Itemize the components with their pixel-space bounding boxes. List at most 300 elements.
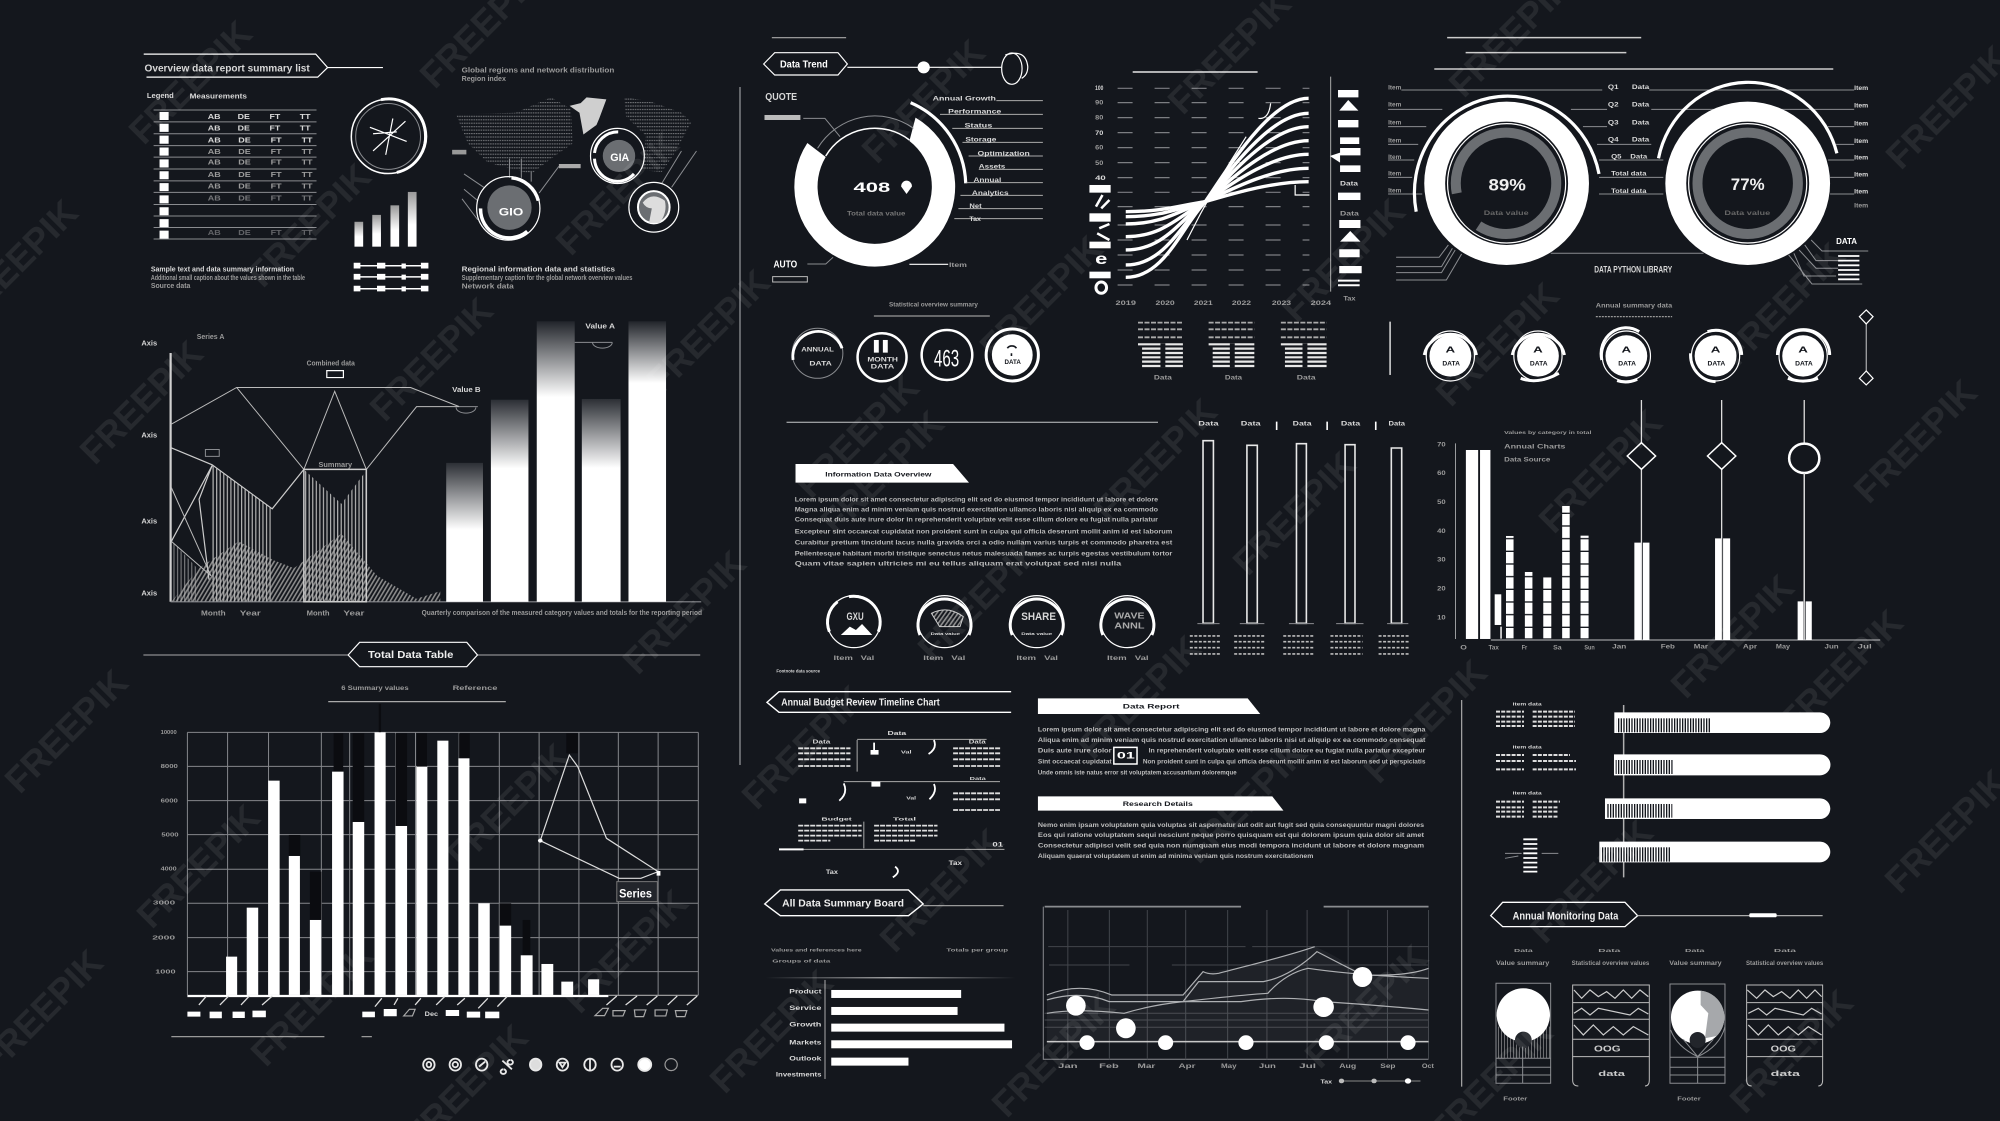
tube columns: Data xyxy=(1293,420,1312,427)
gauge: topic 3: SHARE xyxy=(1021,610,1056,623)
gauge 2 xyxy=(858,333,907,381)
tube columns: Data xyxy=(1388,420,1405,427)
chart axis labels: Jun xyxy=(1259,1062,1276,1070)
text block A: In reprehenderit voluptate velit esse cillum dolore eu fugiat nulla pariatur excepteur xyxy=(1149,747,1425,754)
axis labels: Year xyxy=(343,609,364,618)
card 4: zigzag table xyxy=(1746,948,1824,1086)
gauge 2 xyxy=(1512,331,1564,381)
area chart: wireframe polygons xyxy=(141,332,701,618)
callout: map marker large xyxy=(477,177,540,240)
stem markers with twin bars: Sun xyxy=(1584,644,1595,651)
line chart: sigmoid curves xyxy=(1089,71,1362,307)
watermarks: FREEPIK xyxy=(1522,812,1661,951)
bar chart: axis and segmented bars: Annual Charts xyxy=(1504,443,1566,450)
card 2: zigzag table: OOG xyxy=(1594,1044,1621,1054)
table: rows with white squares: AB DE FT TT xyxy=(208,124,311,133)
chart axis labels: Oct xyxy=(1422,1062,1434,1070)
callouts under rings: Annual summary data xyxy=(1596,301,1673,309)
leader lines and labels: Total data xyxy=(1611,169,1647,177)
banner heading A: Data Report xyxy=(1123,702,1180,710)
heading: top-left header tab xyxy=(144,54,383,77)
heading: horizontal bars tab xyxy=(765,890,1016,978)
bar chart: horizontal bars: Growth xyxy=(789,1021,822,1028)
chart axis labels: Jul xyxy=(1299,1062,1316,1070)
stem markers with twin bars: Feb xyxy=(1661,643,1675,650)
heading: network tab: Annual Budget Review Timeline Chart xyxy=(781,696,940,708)
sliders xyxy=(354,263,428,291)
table: rows with white squares: AB DE FT TT xyxy=(208,170,313,179)
chart axis labels: Feb xyxy=(1099,1062,1119,1070)
donut chart: 408: Total data value xyxy=(847,209,905,217)
donut labels: Optimization xyxy=(978,149,1030,157)
gauge 2: A xyxy=(1533,345,1544,354)
donut labels: QUOTE xyxy=(765,92,797,103)
donut chart: 408 xyxy=(794,103,966,267)
y axis labels: 5000 xyxy=(161,832,179,839)
leader lines and labels: Item xyxy=(1388,136,1402,144)
heading: top-left header tab: Overview data report summary list xyxy=(145,64,310,74)
chart axis labels: Sep xyxy=(1380,1062,1396,1070)
watermarks: FREEPIK xyxy=(1846,372,1985,511)
donut labels: Annual Growth xyxy=(933,94,996,102)
x-axis labels: 2023 xyxy=(1272,299,1291,307)
watermarks: FREEPIK xyxy=(1356,652,1495,791)
axis labels: Axis xyxy=(141,589,157,598)
gauge 1 xyxy=(792,328,843,378)
table: rows with white squares: AB DE FT TT xyxy=(208,194,313,203)
gauge row: four topic gauges xyxy=(776,596,1154,674)
leader lines and labels: Item xyxy=(1854,187,1869,195)
leader lines and labels: Q3 Data xyxy=(1608,118,1650,126)
leader lines and labels: Item xyxy=(1854,170,1869,178)
watermarks: FREEPIK xyxy=(1428,275,1567,414)
x-axis labels: 2019 xyxy=(1116,299,1136,307)
gauge: topic 4: ANNL xyxy=(1114,621,1145,631)
gauge 3: 463 xyxy=(934,345,959,372)
axis labels: Month xyxy=(201,609,226,618)
heading: donut section tab xyxy=(764,53,1028,84)
leader lines and labels: Total data xyxy=(1611,187,1647,195)
heading: horizontal bars tab: Totals per group xyxy=(946,948,1009,953)
mini tables: three striped columns xyxy=(1138,323,1327,381)
bar chart: horizontal bars: Product xyxy=(789,987,822,995)
heading: bar chart tab: 6 Summary values xyxy=(341,684,409,692)
y axis labels: 6000 xyxy=(161,798,179,804)
icon row xyxy=(423,1058,677,1074)
stem markers with twin bars: Mar xyxy=(1694,643,1709,650)
gauge 3: A xyxy=(1622,345,1632,354)
watermarks: FREEPIK xyxy=(972,228,1111,367)
bar chart: small four bars xyxy=(354,192,417,247)
watermarks: FREEPIK xyxy=(1772,602,1911,741)
card 1: white circle: Data xyxy=(1514,948,1533,953)
heading: horizontal bars tab: All Data Summary Board xyxy=(782,897,904,909)
y axis labels: 2000 xyxy=(152,935,176,941)
heading: horizontal bars tab: Groups of data xyxy=(772,959,832,964)
text block A: Aliqua enim ad minim veniam quis nostrud exercitation ullamco laboris nisi ut aliquip ex ea commodo consequat xyxy=(1038,736,1426,744)
banner heading B xyxy=(1038,796,1283,811)
callout: map marker right: GIA xyxy=(610,152,629,164)
heading: bar chart tab: Reference xyxy=(453,684,497,692)
text block B: Aliquam quaerat voluptatem ut enim ad minima veniam quis nostrum exercitationem xyxy=(1038,852,1313,860)
callout: map marker right xyxy=(591,128,644,184)
stem markers with twin bars: Jun xyxy=(1825,643,1839,650)
ring chart: 77%: Data value xyxy=(1724,209,1770,217)
left icon strip: e xyxy=(1095,250,1107,268)
donut labels: Analytics xyxy=(972,189,1009,197)
stem markers with twin bars: Jan xyxy=(1612,643,1626,650)
leader lines and labels: Item xyxy=(1388,100,1402,108)
left icon strip: 40 xyxy=(1095,174,1106,182)
label blocks: Item data xyxy=(1513,701,1542,706)
text block A: Lorem ipsum dolor sit amet consectetur adipiscing elit sed do eiusmod tempor incididunt ut labore et dolore magna xyxy=(1038,725,1426,733)
leader lines and labels: Q5 Data xyxy=(1611,152,1648,160)
gauge captions: Item Val xyxy=(1107,654,1149,662)
network diagram: Val xyxy=(901,750,912,755)
text block: table note: Additional small caption about the values shown in the table xyxy=(151,273,306,282)
chart axis labels: Aug xyxy=(1339,1062,1356,1070)
watermarks: FREEPIK xyxy=(1176,732,1315,871)
text block: map note: Regional information data and statistics xyxy=(462,265,615,274)
axis labels: Summary xyxy=(318,460,353,469)
bar chart: five gradient bars: Value B xyxy=(452,385,481,394)
watermarks: FREEPIK xyxy=(1531,402,1670,541)
card 3: circle with grey sector: Value summary xyxy=(1669,960,1722,967)
leader lines and labels: Item xyxy=(1388,169,1402,177)
card 1: white circle: Value summary xyxy=(1496,960,1550,967)
axis labels: Series A xyxy=(197,332,225,341)
network diagram: Data xyxy=(812,739,831,745)
diamond slider xyxy=(1859,310,1873,385)
table: rows with white squares: AB DE FT TT xyxy=(208,157,313,166)
x-axis labels: 2022 xyxy=(1232,299,1251,307)
bar chart: axis and segmented bars: Values by category in total xyxy=(1504,431,1592,436)
callouts under rings xyxy=(1396,237,1868,317)
heading: bar chart tab xyxy=(143,642,700,702)
text block: paragraph: Quam vitae sapien ultricies mi eu tellus aliquam erat volutpat sed nisi nulla xyxy=(795,559,1122,567)
bar chart: five gradient bars xyxy=(422,321,702,617)
chart grid xyxy=(187,732,698,995)
bar chart: axis and segmented bars: 50 xyxy=(1437,498,1446,506)
gauge 4 xyxy=(1691,330,1742,382)
gauge 5: DATA xyxy=(1795,359,1813,367)
watermarks: FREEPIK xyxy=(1274,191,1413,330)
network diagram: Data xyxy=(887,731,907,737)
bar chart: horizontal bars: Service xyxy=(789,1004,822,1012)
x-axis labels: 2024 xyxy=(1311,299,1332,307)
text block: map note xyxy=(462,265,632,290)
table: rows with white squares: Legend xyxy=(147,91,174,100)
watermarks: FREEPIK xyxy=(1225,444,1364,583)
stem markers with twin bars: Apr xyxy=(1743,643,1758,650)
watermarks: FREEPIK xyxy=(910,530,1049,669)
gauge captions: Item Val xyxy=(923,654,965,662)
card 3: circle with grey sector xyxy=(1669,948,1725,1083)
gauge captions: Footnote data source xyxy=(776,669,820,674)
bar chart: axis and segmented bars xyxy=(1437,431,1880,640)
chart axis labels: Mar xyxy=(1137,1062,1155,1070)
text block A: 01 xyxy=(1117,751,1135,761)
axis labels: Axis xyxy=(141,517,157,526)
panel: pill progress bars and data cards xyxy=(1462,700,1830,1103)
bar chart: five gradient bars: Value A xyxy=(585,322,615,331)
gauge 4 xyxy=(986,329,1038,381)
mini table 1: Data xyxy=(1154,373,1173,381)
watermarks: FREEPIK xyxy=(1714,235,1853,374)
card 4: zigzag table: data xyxy=(1771,1069,1802,1078)
card 4: zigzag table: Data xyxy=(1774,948,1797,953)
gauge 1: A xyxy=(1446,345,1456,354)
banner heading B: Research Details xyxy=(1123,800,1194,808)
axis labels: Axis xyxy=(141,339,157,347)
mini table 2 xyxy=(1209,323,1254,381)
ring chart: 89%: 89% xyxy=(1489,175,1526,194)
icon: radial gauge xyxy=(351,99,426,174)
leader lines and labels: Item xyxy=(1854,119,1869,127)
leader lines and labels: Item xyxy=(1854,201,1869,209)
donut chart: 408: 408 xyxy=(853,180,891,196)
watermarks: FREEPIK xyxy=(362,290,501,429)
bar shadows xyxy=(289,704,578,955)
text block B: Consectetur adipisci velit sed quia non numquam eius modi tempora incidunt ut labore et dolore magnam xyxy=(1038,841,1424,849)
right icon strip: Data xyxy=(1340,209,1360,217)
gauge row: four small gauges xyxy=(792,328,1038,381)
leader lines and labels: Item xyxy=(1388,83,1402,91)
donut labels: Item xyxy=(949,261,967,269)
donut labels xyxy=(764,92,1043,316)
gauge 3: DATA xyxy=(1618,359,1637,367)
leader lines and labels: Item xyxy=(1388,186,1402,194)
ring chart: 77% xyxy=(1658,82,1837,265)
network diagram: Tax xyxy=(949,859,963,867)
card 2: zigzag table: Data xyxy=(1598,948,1621,953)
tube columns: Data xyxy=(1341,420,1361,427)
heading: network tab xyxy=(767,692,1011,712)
donut labels: Annual xyxy=(973,176,1001,184)
heading: horizontal bars tab: Values and references here xyxy=(771,948,862,953)
watermarks: FREEPIK xyxy=(1086,391,1225,530)
donut labels: Statistical overview summary xyxy=(889,300,979,308)
watermarks: FREEPIK xyxy=(702,962,841,1101)
gauge: mountains xyxy=(827,596,880,648)
bar chart: horizontal bars: Investments xyxy=(776,1071,822,1078)
panel: text section with banner and gauges xyxy=(776,422,1173,674)
y axis labels: 4000 xyxy=(161,866,177,873)
gauge captions xyxy=(776,654,1149,674)
text block A: Unde omnis iste natus error sit voluptatem accusantium doloremque xyxy=(1038,768,1237,776)
mini table 3: Data xyxy=(1297,373,1317,381)
card 2: zigzag table xyxy=(1572,948,1650,1086)
watermarks: FREEPIK xyxy=(1070,628,1209,767)
gauge: topic 3: Data value xyxy=(1021,631,1053,636)
card footers: Footer xyxy=(1503,1097,1527,1103)
watermarks: FREEPIK xyxy=(243,935,382,1074)
gauge captions: Item Val xyxy=(833,654,874,662)
text block: table note: Sample text and data summary information xyxy=(151,265,294,274)
leader lines and labels: Q2 Data xyxy=(1608,100,1650,108)
banner heading: Information Data Overview xyxy=(825,470,932,478)
left icon strip: 50 xyxy=(1095,159,1103,167)
gauge: mountains: GXU xyxy=(847,610,864,623)
watermarks: FREEPIK xyxy=(557,882,696,1021)
bar chart: pill progress bars xyxy=(1599,705,1830,877)
slider legend xyxy=(1320,1078,1420,1085)
y axis labels: 10000 xyxy=(161,729,177,736)
x-axis labels: 2020 xyxy=(1156,299,1175,307)
network diagram: Data xyxy=(969,739,986,745)
axis labels: Combined data xyxy=(307,359,355,368)
mini table 3 xyxy=(1281,323,1327,381)
stem markers with twin bars: Jul xyxy=(1858,643,1872,650)
panel: network diagram, text blocks, horizontal bars and line chart xyxy=(750,680,1434,1085)
chart axis labels: May xyxy=(1221,1062,1237,1070)
table: rows with white squares: AB DE FT TT xyxy=(208,136,313,145)
network diagram: Data xyxy=(970,777,987,782)
leader lines and labels xyxy=(1388,83,1869,209)
text block: paragraph: Consequat duis aute irure dolor in reprehenderit voluptate velit esse cillum dolore eu fugiat nulla pariatur xyxy=(795,515,1158,523)
baseline and x ticks: Dec xyxy=(425,1010,438,1018)
gauge 4: A xyxy=(1711,345,1721,354)
vertical divider xyxy=(739,87,741,765)
text block: map note: Supplementary caption for the global network overview values xyxy=(462,273,632,282)
label blocks: Item data xyxy=(1513,745,1542,750)
gauge row: five white gauges xyxy=(1424,328,1830,382)
gauge 2: MONTH xyxy=(867,355,898,363)
panel: donut chart and gauges xyxy=(764,38,1362,381)
text block: paragraph: Excepteur sint occaecat cupidatat non proident sunt in culpa qui officia deserunt mollit anim id est laborum xyxy=(795,527,1173,535)
baseline and x ticks xyxy=(187,995,698,1018)
stem markers with twin bars: May xyxy=(1776,643,1790,650)
watermarks: FREEPIK xyxy=(639,262,778,401)
bar chart: axis and segmented bars: 70 xyxy=(1437,441,1446,448)
text block: table note: Source data xyxy=(151,281,191,290)
watermarks: FREEPIK xyxy=(854,32,993,171)
icons: ten small circles xyxy=(423,1058,677,1074)
watermarks: FREEPIK xyxy=(734,678,873,817)
label blocks xyxy=(1496,701,1576,872)
stem markers with twin bars xyxy=(1460,400,1872,651)
right icon strip: Tax xyxy=(1343,294,1356,302)
axis labels: Year xyxy=(240,609,261,618)
card 4: zigzag table: OOG xyxy=(1771,1044,1796,1054)
text block A: Sint occaecat cupidatat xyxy=(1038,757,1112,765)
card footers xyxy=(1503,1097,1701,1103)
stem markers with twin bars: Sa xyxy=(1553,644,1562,651)
text block A: Non proident sunt in culpa qui officia deserunt mollit anim id est laborum sed ut perspiciatis xyxy=(1143,757,1426,765)
heading: cards tab: Annual Monitoring Data xyxy=(1513,910,1618,922)
watermarks: FREEPIK xyxy=(129,797,268,936)
left icon strip: 70 xyxy=(1095,129,1103,137)
bar chart: horizontal bars xyxy=(776,980,1012,1079)
donut labels: AUTO xyxy=(773,259,797,270)
callout: map marker lower xyxy=(629,182,679,232)
mini table 1 xyxy=(1138,323,1183,381)
gauge 1: ANNUAL xyxy=(801,345,834,353)
slider legend: Tax xyxy=(1320,1079,1333,1085)
world map with three circular callouts: Region index xyxy=(462,74,507,83)
network diagram xyxy=(779,731,1004,877)
y axis labels xyxy=(152,729,179,975)
table: rows with white squares: Measurements xyxy=(190,92,247,101)
gauge: topic 4 xyxy=(1101,596,1154,648)
axis labels: Axis xyxy=(141,431,157,440)
callouts under rings: DATA PYTHON LIBRARY xyxy=(1594,265,1672,275)
leader lines and labels: Q1 Data xyxy=(1608,83,1650,91)
watermarks: FREEPIK xyxy=(72,333,211,472)
text block: paragraph: Lorem ipsum dolor sit amet consectetur adipiscing elit sed do eiusmod tempor incididunt ut labore et dolore xyxy=(795,495,1158,503)
banner heading xyxy=(796,464,969,483)
text block: paragraph: Magna aliqua enim ad minim veniam quis nostrud exercitation ullamco laboris nisi aliquip ex ea commodo xyxy=(795,505,1158,513)
line chart: multi-series with dots xyxy=(750,680,1434,1085)
network diagram: 01 xyxy=(992,841,1004,848)
gauge 1: DATA xyxy=(1442,359,1461,367)
card 3: circle with grey sector: Data xyxy=(1685,948,1705,953)
watermarks: FREEPIK xyxy=(984,986,1123,1121)
y axis labels: 1000 xyxy=(155,969,176,975)
table: rows with white squares: AB DE FT TT xyxy=(208,182,313,190)
text block: table note xyxy=(151,265,306,290)
bar chart: horizontal bars: Outlook xyxy=(789,1054,822,1062)
watermarks: FREEPIK xyxy=(1663,567,1802,706)
y axis labels: 8000 xyxy=(161,763,179,770)
y axis labels: 3000 xyxy=(153,900,176,906)
donut labels: Performance xyxy=(948,107,1001,115)
text block: map note: Network data xyxy=(462,281,515,290)
watermarks: FREEPIK xyxy=(548,124,687,263)
right icon strip xyxy=(1330,77,1362,302)
mini table 2: Data xyxy=(1225,373,1243,381)
donut labels: Status xyxy=(965,121,992,129)
gauge 1 xyxy=(1424,331,1476,381)
bar chart: axis and segmented bars: 20 xyxy=(1437,585,1446,592)
watermarks: FREEPIK xyxy=(1722,982,1861,1121)
text block B: Eos qui ratione voluptatem sequi nesciunt neque porro quisquam est qui dolorem ipsum quia dolor sit amet xyxy=(1038,831,1424,839)
bar chart: horizontal bars: Markets xyxy=(789,1038,822,1046)
card 2: zigzag table: Statistical overview values xyxy=(1572,960,1650,967)
network diagram: Val xyxy=(906,796,917,801)
gauge: topic 3 xyxy=(1010,596,1063,648)
world map with three circular callouts xyxy=(452,66,696,240)
gauge: topic 2: Data value xyxy=(931,631,961,636)
watermarks: FREEPIK xyxy=(872,821,1011,960)
tube columns: Data xyxy=(1198,420,1219,427)
leader lines and labels: Item xyxy=(1388,118,1402,126)
callouts under rings: DATA xyxy=(1836,237,1857,247)
gauge 4: DATA xyxy=(1708,359,1726,367)
table: rows with white squares: AB DE FT TT xyxy=(208,228,313,237)
text block A xyxy=(1038,725,1426,776)
panel: top-left data table, gauge, world map and area chart xyxy=(141,54,702,618)
watermarks: FREEPIK xyxy=(439,736,578,875)
gauge: topic 2 xyxy=(918,596,971,648)
watermarks: FREEPIK xyxy=(813,403,952,542)
gauge 5 xyxy=(1777,330,1830,381)
gauge 2: DATA xyxy=(1530,359,1548,367)
watermarks: FREEPIK xyxy=(240,156,379,295)
banner heading A xyxy=(1038,698,1260,714)
heading: cards tab xyxy=(1491,902,1823,927)
chart axis labels: Apr xyxy=(1179,1062,1196,1070)
line overlay with callout box: Series xyxy=(619,886,652,900)
axis labels xyxy=(141,332,364,618)
stem markers with twin bars: O xyxy=(1460,644,1467,651)
x-axis labels xyxy=(1116,299,1332,307)
table: rows with white squares: AB DE FT TT xyxy=(208,112,311,121)
chart axis labels xyxy=(1058,1062,1434,1070)
stem markers with twin bars: Fr xyxy=(1522,644,1528,651)
card 2: zigzag table: data xyxy=(1598,1069,1627,1078)
stem markers with twin bars: Tax xyxy=(1489,644,1499,651)
